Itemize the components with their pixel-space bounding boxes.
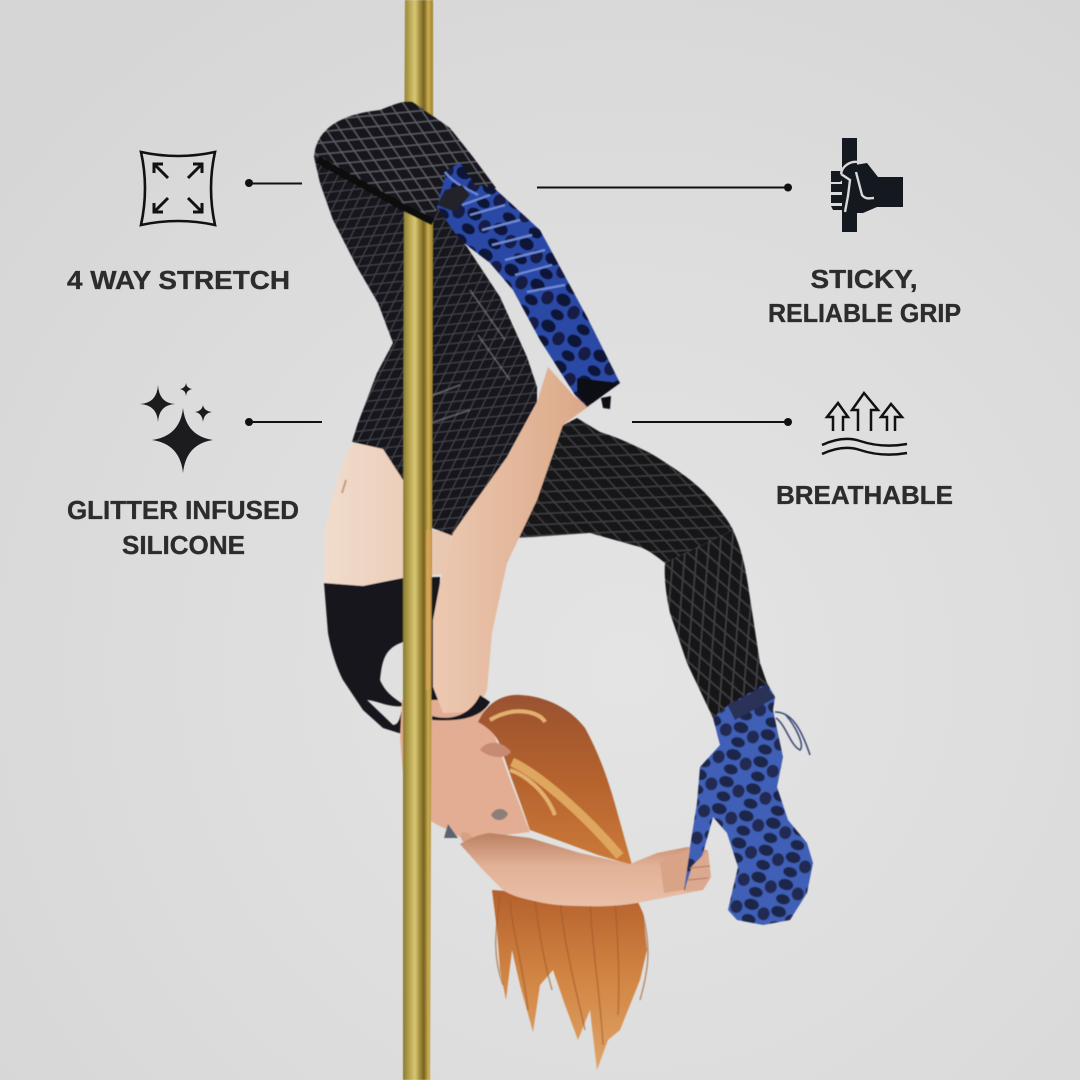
photo: pole dancer inverted on brass pole (314, 0, 813, 1080)
label (768, 266, 961, 328)
feature: breathable (632, 393, 953, 510)
choker strap (432, 695, 490, 720)
icon: hand gripping pole (831, 138, 903, 232)
crop top (324, 577, 440, 734)
label (67, 497, 299, 560)
hip and thigh legging (314, 157, 537, 536)
leader line (245, 179, 302, 187)
lower hair (492, 890, 647, 1070)
neck and face (400, 700, 530, 845)
boot cuff (728, 685, 775, 720)
icon: sparkles (140, 383, 213, 473)
upper boot sole and heel tip (577, 378, 620, 409)
second leg legging (440, 418, 768, 718)
hair strands (496, 895, 648, 1045)
boot brand tab (437, 185, 470, 212)
lower leopard boot (682, 683, 813, 925)
hair highlights (490, 711, 555, 815)
leader line (537, 184, 792, 192)
boot laces (775, 712, 810, 755)
upper hair (478, 695, 632, 865)
label: STICKY, (810, 266, 918, 294)
bent calf legging over pole (314, 101, 496, 222)
pole reflection (426, 530, 431, 690)
label: RELIABLE GRIP (768, 300, 961, 328)
belly mark (342, 480, 346, 493)
label: SILICONE (122, 532, 245, 560)
leader line (245, 418, 322, 426)
icon: stretch square (141, 152, 215, 225)
raised arm (433, 367, 592, 713)
brass pole (403, 0, 433, 1080)
icon: rising air arrows over waves (822, 393, 907, 455)
label: 4 WAY STRETCH (67, 267, 290, 295)
upper leopard boot (437, 163, 620, 409)
hand gripping heel (660, 849, 711, 893)
boot lacing (445, 172, 565, 292)
label: GLITTER INFUSED (67, 497, 299, 525)
face details (444, 743, 511, 845)
leader line (632, 418, 792, 426)
label: BREATHABLE (776, 482, 953, 510)
torso skin (324, 443, 452, 586)
feature: 4 way stretch (67, 152, 302, 295)
arm holding heel (460, 833, 711, 906)
gloss highlights on thigh (420, 290, 510, 425)
feature: glitter infused silicone (67, 383, 322, 560)
feature: sticky reliable grip (537, 138, 961, 328)
